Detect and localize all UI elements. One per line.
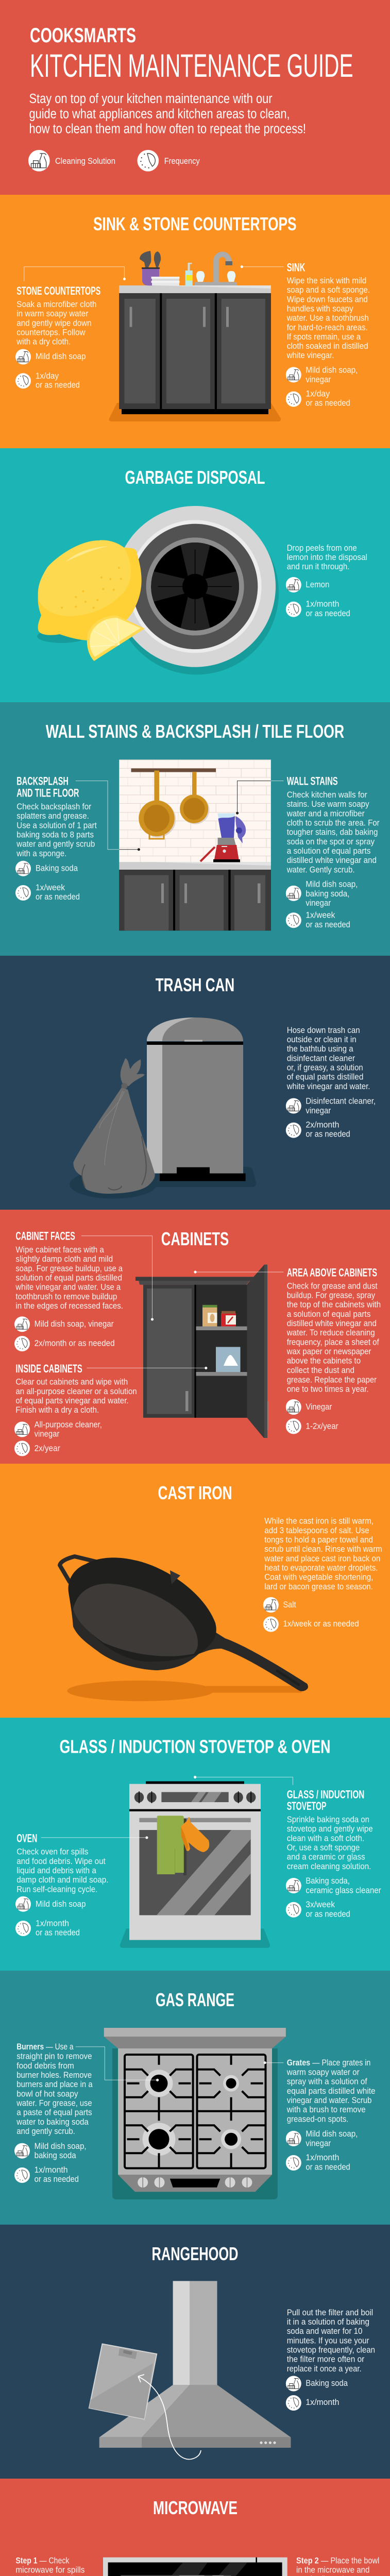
text: burners: and gently scrub. [16, 2127, 75, 2136]
text: rangehood: replace it once a year. [287, 2364, 362, 2374]
text: rangehood: 1x/month [306, 2398, 339, 2407]
text: grates: or as needed [306, 2162, 350, 2172]
text: trash can: or as needed [306, 1129, 350, 1139]
panel: sink and stone countertops [0, 195, 390, 448]
text: cast iron: heat to evaporate water droplets. [264, 1563, 378, 1572]
text: grates: with a brush to remove [286, 2105, 366, 2114]
illustration: oven [120, 1782, 270, 1948]
text: cabinet faces: soap. For grease buildup, use a [15, 1264, 123, 1273]
heading: TRASH CAN [156, 974, 234, 995]
text: rangehood: soda and water for 10 [287, 2327, 363, 2336]
text: sink [286, 261, 370, 408]
text: disposal: lemon into the disposal [287, 553, 367, 562]
illustration: jars [202, 1305, 240, 1372]
text: step 1 [14, 2556, 88, 2576]
panel: glass induction stovetop and oven [0, 1718, 390, 1971]
text: area above cabinets: 1-2x/year [306, 1422, 338, 1431]
text: burners: a paste of equal parts [16, 2108, 92, 2117]
text: wall stains: WALL STAINS [287, 774, 338, 787]
text: glass induction stovetop: 3x/week [306, 1900, 335, 1909]
panel: gas range [0, 1971, 390, 2225]
text: area above cabinets: distilled white vinegar and [287, 1319, 377, 1328]
heading: CAST IRON [158, 1482, 232, 1503]
text: rangehood: Baking soda [306, 2379, 348, 2388]
text: inside cabinets [14, 1362, 137, 1456]
arrow: filter to hood [138, 2375, 201, 2459]
text: wall stains: water and a microfiber [286, 809, 365, 818]
text: glass induction stovetop: Sprinkle baking soda on [287, 1815, 369, 1824]
text: trash can: the bathtub using a [287, 1044, 353, 1054]
text: area above cabinets: one to two times a year. [287, 1385, 369, 1394]
legend [28, 150, 200, 172]
text: area above cabinets: wax paper or newspaper [286, 1347, 371, 1356]
text: glass induction stovetop: STOVETOP [287, 1800, 327, 1812]
callout line: backsplash [76, 781, 140, 851]
heading: GARBAGE DISPOSAL [125, 467, 265, 488]
text: glass induction stovetop: ceramic glass cleaner [306, 1886, 381, 1895]
text: stone countertops: in warm soapy water [16, 309, 89, 318]
text: area above cabinets: buildup. For grease, spray [287, 1291, 376, 1300]
text: cast iron: 1x/week or as needed [283, 1619, 359, 1629]
text: cabinet faces: CABINET FACES [15, 1229, 75, 1242]
illustration: lemon [37, 540, 145, 661]
text: trash can: disinfectant cleaner [287, 1054, 355, 1063]
text: cast iron: Salt [283, 1600, 296, 1609]
text: glass induction stovetop: cream cleaning solution. [287, 1862, 371, 1871]
text: trash can: white vinegar and water. [286, 1082, 370, 1091]
text: inside cabinets: vinegar [35, 1429, 60, 1438]
text: glass induction stovetop: clean with a soft cloth. [287, 1834, 364, 1843]
text: burners: Burners — Use a [16, 2042, 74, 2052]
text: wall stains: Mild dish soap, [306, 880, 358, 889]
text: oven: damp cloth and mild soap. [16, 1875, 108, 1885]
text: stone countertops: countertops. Follow [16, 328, 86, 337]
legend: Frequency [164, 157, 200, 166]
text: stone countertops: 1x/day [36, 371, 59, 381]
text: step 1: Step 1 — Check [15, 2556, 70, 2565]
text: wall stains: cloth to scrub the area. For [287, 818, 380, 827]
illustration: microwave [91, 2557, 299, 2576]
text: glass induction stovetop: or as needed [306, 1909, 350, 1919]
text: backsplash: 1x/week [36, 883, 65, 892]
text: grates: 1x/month [306, 2153, 339, 2162]
text: grates: Grates — Place grates in [287, 2058, 370, 2067]
illustration: cabinet [135, 1264, 268, 1438]
intro text [29, 92, 306, 137]
text: stone countertops: and gently wipe down [16, 318, 92, 328]
text: backsplash [15, 774, 97, 902]
callout line: cabinet faces [81, 1236, 154, 1320]
text: wall stains: water. Gently scrub. [286, 865, 354, 874]
intro text: guide to what appliances and kitchen areas to clean, [29, 107, 290, 122]
text: cabinet faces: Mild dish soap, vinegar [35, 1319, 114, 1329]
text: cast iron: Coat with vegetable shortening, [264, 1573, 373, 1582]
text: oven: liquid and debris with a [16, 1866, 97, 1875]
text: grates [286, 2058, 376, 2172]
text: backsplash: or as needed [36, 892, 80, 902]
text: inside cabinets: an all-purpose cleaner or a solution [15, 1387, 137, 1396]
text: disposal: Lemon [306, 580, 329, 589]
text: wall stains: baking soda, [306, 889, 349, 899]
text: burners: burner holes. Remove [16, 2071, 92, 2080]
callout line: inside cabinets [87, 1367, 207, 1369]
text: cast iron: scrub until clean. Rinse with warm [264, 1545, 382, 1554]
text: oven: 1x/month [36, 1919, 69, 1928]
text: inside cabinets: INSIDE CABINETS [15, 1362, 82, 1375]
illustration: trash can [147, 1018, 256, 1187]
callout line: grates [264, 2061, 283, 2064]
illustration: towel and mitt [157, 1816, 209, 1875]
text: inside cabinets: Finish with a dry a cloth. [15, 1405, 99, 1415]
text: stone countertops: Mild dish soap [36, 352, 86, 361]
text: grates: spray with a solution of [287, 2077, 367, 2087]
text: grates: warm soapy water or [286, 2068, 360, 2077]
text: grates: Mild dish soap, [306, 2129, 358, 2139]
illustration: gas range [104, 2028, 286, 2199]
text: rangehood [286, 2308, 375, 2411]
text: trash can: Disinfectant cleaner, [306, 1097, 376, 1106]
text: backsplash: with a sponge. [16, 849, 66, 858]
panel: cast iron [0, 1464, 390, 1718]
text: wall stains: Check kitchen walls for [287, 790, 367, 800]
text: burners: Mild dish soap, [35, 2142, 87, 2151]
text: wall stains: distilled white vinegar and [287, 856, 377, 865]
callout line: stovetop [194, 1776, 293, 1785]
text: sink: handles with soapy [287, 304, 353, 313]
text: wall stains: tougher stains, dab baking [287, 828, 378, 837]
panel: trash can [0, 956, 390, 1210]
text: sink: Wipe down faucets and [287, 295, 368, 304]
panel: rangehood [0, 2225, 390, 2479]
text: cast iron [263, 1517, 382, 1632]
text: cabinet faces: white vinegar and water. Use a [15, 1283, 121, 1292]
text: trash can: outside or clean it in [287, 1035, 357, 1044]
text: burners: burners and place in a [16, 2080, 93, 2089]
text: disposal [286, 544, 367, 618]
text: trash can [286, 1026, 376, 1139]
heading: GAS RANGE [156, 1989, 234, 2010]
text: sink: 1x/day [306, 389, 330, 399]
text: backsplash: BACKSPLASH [16, 774, 69, 787]
text: glass induction stovetop: stovetop and gently wipe [287, 1824, 373, 1834]
callout line: area above cabinets [194, 1270, 283, 1274]
text: stone countertops [15, 284, 100, 389]
text: burners: water. For grease, use [16, 2099, 92, 2108]
illustration: rangehood [89, 2281, 291, 2459]
logo: Cook Smarts: COOKSMARTS [30, 24, 136, 47]
text: backsplash: Use a solution of 1 part [16, 821, 97, 830]
text: area above cabinets: water. To reduce cleaning [286, 1328, 375, 1337]
illustration: sink cabinet [109, 251, 281, 421]
callout line: burners [76, 2047, 159, 2081]
text: cast iron: lard or bacon grease to season. [264, 1582, 373, 1591]
callout line: oven [41, 1836, 148, 1839]
text: trash can: or, if greasy, a solution [287, 1063, 363, 1073]
text: trash can: of equal parts distilled [287, 1073, 363, 1082]
panel: header [0, 0, 390, 195]
text: burners: bowl of hot soapy [16, 2089, 78, 2098]
text: inside cabinets: Clear out cabinets and wipe with [15, 1378, 128, 1387]
text: cabinet faces [14, 1229, 123, 1351]
text: sink: SINK [287, 261, 305, 274]
text: wall stains: stains. Use warm soapy [287, 800, 369, 809]
text: wall stains: 1x/week [306, 911, 335, 920]
text: area above cabinets: a solution of equal parts [287, 1310, 370, 1319]
text: backsplash: Baking soda [36, 863, 78, 873]
text: stone countertops: STONE COUNTERTOPS [16, 284, 100, 297]
legend: Cleaning Solution [55, 157, 115, 166]
text: inside cabinets: of equal parts vinegar and water. [15, 1396, 129, 1405]
panel: wall stains and backsplash [0, 702, 390, 956]
text: backsplash: AND TILE FLOOR [16, 787, 79, 800]
text: step 1: microwave for spills [15, 2566, 84, 2575]
panel: cabinets [0, 1210, 390, 1464]
text: inside cabinets: 2x/year [35, 1444, 60, 1453]
text: trash can: 2x/month [306, 1121, 339, 1130]
panel: microwave [0, 2479, 390, 2576]
text: cast iron: water and place cast iron back on [264, 1554, 380, 1563]
text: burners: water to baking soda [16, 2117, 89, 2127]
callout line: stone countertops [24, 267, 126, 281]
text: sink: soap and a soft sponge. [287, 285, 370, 295]
illustration: disposal [114, 506, 279, 675]
text: burners: straight pin to remove [16, 2052, 92, 2061]
text: cabinet faces: slightly damp cloth and mild [15, 1255, 113, 1264]
illustration: lemon slice [87, 615, 145, 661]
text: cabinet faces: Wipe cabinet faces with a [15, 1245, 105, 1255]
text: sink: vinegar [306, 375, 331, 384]
text: sink: for hard-to-reach areas. [287, 323, 368, 332]
text: burners [14, 2042, 93, 2184]
text: area above cabinets: Check for grease and dust [287, 1281, 378, 1291]
text: wall stains [286, 774, 380, 929]
callout line: sink [241, 265, 283, 268]
text: grates: vinegar and water. Scrub [287, 2096, 371, 2105]
text: wall stains: or as needed [306, 920, 350, 929]
text: backsplash: baking soda to 8 parts [16, 831, 94, 840]
text: cast iron: While the cast iron is still warm, [264, 1517, 374, 1526]
text: oven [15, 1832, 108, 1938]
text: trash can: vinegar [306, 1106, 331, 1115]
text: cast iron: add 3 tablespoons of salt. Use [264, 1526, 369, 1535]
text: inside cabinets: All-purpose cleaner, [35, 1420, 102, 1429]
text: sink: Wipe the sink with mild [287, 276, 366, 285]
text: rangehood: it in a solution of baking [287, 2317, 369, 2327]
illustration: skillet [60, 1556, 308, 1701]
text: burners: food debris from [16, 2061, 74, 2071]
text: cabinet faces: in the edges of recessed faces. [15, 1301, 123, 1311]
text: cabinet faces: toothbrush to remove buildup [15, 1292, 117, 1301]
text: trash can: Hose down trash can [287, 1026, 360, 1035]
text: grates: greased-on spots. [287, 2114, 348, 2124]
text: glass induction stovetop: Baking soda, [306, 1876, 350, 1886]
text: area above cabinets: the top of the cabinets with [287, 1300, 381, 1310]
text: area above cabinets: frequency, place a sheet of [287, 1337, 379, 1347]
text: backsplash: Check backsplash for [16, 802, 92, 811]
text: oven: and food debris. Wipe out [16, 1857, 106, 1866]
illustration: kitchen wall [119, 759, 271, 930]
text: glass induction stovetop: Or, use a soft sponge [287, 1843, 360, 1853]
text: sink: Mild dish soap, [306, 366, 358, 375]
text: disposal: Drop peels from one [287, 544, 357, 553]
text: rangehood: the filter more often or [287, 2355, 365, 2364]
text: step 2 [296, 2556, 381, 2576]
text: stone countertops: or as needed [36, 380, 80, 389]
text: burners: or as needed [35, 2175, 79, 2184]
illustration: blender [200, 814, 246, 862]
text: wall stains: vinegar [306, 899, 331, 908]
text: disposal: and run it through. [287, 562, 349, 571]
text: step 2: Step 2 — Place the bowl [296, 2556, 379, 2565]
text: cast iron: tongs to hold a paper towel and [264, 1535, 373, 1545]
text: wall stains: soda on the spot or spray [287, 837, 375, 846]
intro text: Stay on top of your kitchen maintenance with our [29, 92, 273, 106]
text: step 2: in the microwave and [296, 2566, 369, 2575]
illustration: filter [89, 2344, 157, 2419]
callout line: wall stains [236, 781, 283, 815]
intro text: how to clean them and how often to repeat the process! [29, 122, 306, 137]
text: area above cabinets: collect the dust and [287, 1366, 354, 1375]
text: area above cabinets: grease. Replace the paper [287, 1375, 377, 1384]
text: grates: vinegar [306, 2139, 331, 2148]
text: disposal: or as needed [306, 609, 350, 618]
text: cabinet faces: solution of equal parts distilled [15, 1274, 122, 1283]
text: burners: baking soda [35, 2151, 76, 2160]
text: sink: If spots remain, use a [287, 332, 361, 342]
text: grates: equal parts distilled white [287, 2087, 376, 2096]
heading: RANGEHOOD [151, 2243, 238, 2264]
text: rangehood: stovetop frequently, clean [287, 2345, 375, 2354]
text: glass induction stovetop: and a ceramic or glass [287, 1853, 365, 1862]
heading: MICROWAVE [153, 2497, 238, 2518]
text: sink: white vinegar. [286, 351, 334, 360]
text: disposal: 1x/month [306, 600, 339, 609]
panel: garbage disposal [0, 448, 390, 702]
text: oven: OVEN [16, 1832, 37, 1844]
text: wall stains: a solution of equal parts [287, 846, 370, 856]
heading: SINK & STONE COUNTERTOPS [93, 213, 297, 234]
text: oven: or as needed [36, 1928, 80, 1938]
illustration: garbage bag [70, 1058, 157, 1198]
text: sink: water. Use a toothbrush [286, 314, 369, 323]
text: rangehood: minutes. If you use your [287, 2336, 369, 2345]
text: oven: Check oven for spills [16, 1848, 88, 1857]
text: backsplash: splatters and grease. [16, 811, 89, 821]
text: sink: cloth soaked in distilled [287, 342, 368, 351]
text: glass induction stovetop [286, 1788, 381, 1919]
text: area above cabinets: Vinegar [306, 1402, 332, 1412]
text: burners: 1x/month [35, 2165, 68, 2175]
text: backsplash: water and gently scrub [16, 840, 95, 849]
text: area above cabinets: above the cabinets to [287, 1357, 361, 1366]
text: sink: or as needed [306, 398, 350, 408]
text: area above cabinets [286, 1266, 381, 1434]
text: oven: Run self-cleaning cycle. [16, 1885, 97, 1894]
text: cabinet faces: 2x/month or as needed [35, 1339, 115, 1348]
text: oven: Mild dish soap [36, 1900, 86, 1909]
text: stone countertops: Soak a microfiber cloth [16, 300, 96, 309]
text: stone countertops: with a dry cloth. [16, 337, 71, 347]
heading: CABINETS [161, 1228, 229, 1249]
text: rangehood: Pull out the filter and boil [287, 2308, 373, 2317]
